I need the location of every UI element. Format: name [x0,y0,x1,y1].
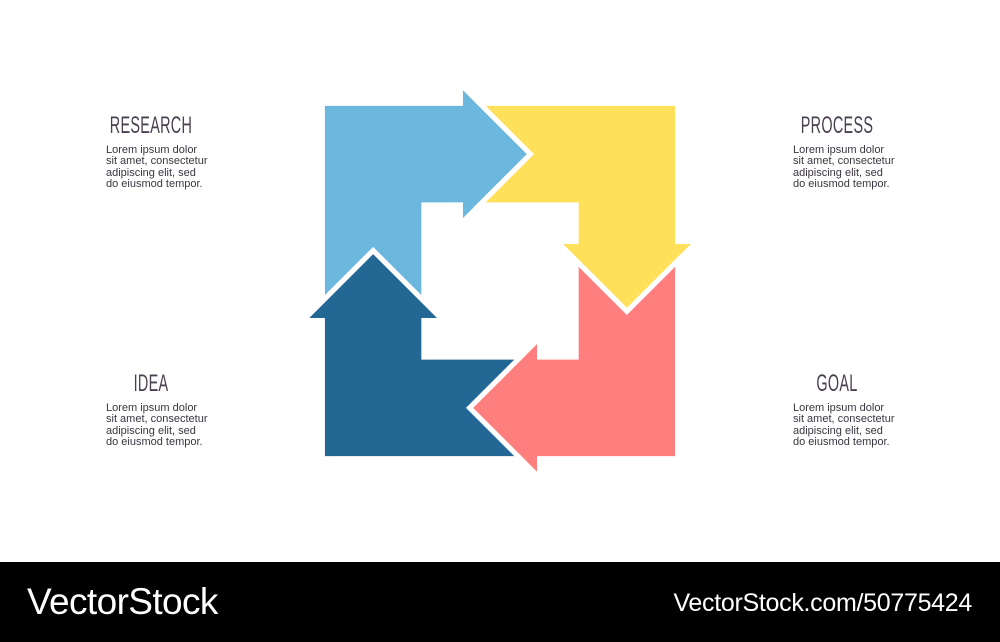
text: research: sit amet, consectetur [106,155,208,167]
text: goal: adipiscing elit, sed [793,425,883,437]
text: process [793,144,894,190]
text: idea: Lorem ipsum dolor [106,402,197,414]
text: process: do eiusmod tempor. [793,178,890,190]
arrow: idea (dark blue) [303,251,520,459]
text: goal [793,402,894,448]
text: goal: do eiusmod tempor. [793,436,890,448]
arrow: research (blue) [322,84,530,301]
text: idea: adipiscing elit, sed [106,425,196,437]
footer logo: VectorStock [27,581,218,622]
text: process: sit amet, consectetur [793,155,894,167]
footer url: VectorStock.com/50775424 [673,589,972,617]
text: process: Lorem ipsum dolor [793,144,884,156]
text: process: adipiscing elit, sed [793,167,883,179]
footer bar [0,562,1000,642]
title: goal: GOAL [816,370,858,397]
text: goal: sit amet, consectetur [793,413,894,425]
text: idea: do eiusmod tempor. [106,436,203,448]
text: idea: sit amet, consectetur [106,413,208,425]
text: research [106,144,208,190]
arrow: process (yellow) [480,103,697,311]
arrow: goal (pink) [470,261,678,478]
title: idea: IDEA [134,370,168,397]
text: research: adipiscing elit, sed [106,167,196,179]
text: goal: Lorem ipsum dolor [793,402,884,414]
text: idea [106,402,208,448]
title: research: RESEARCH [110,112,192,139]
text: research: Lorem ipsum dolor [106,144,197,156]
title: process: PROCESS [801,112,873,139]
text: research: do eiusmod tempor. [106,178,203,190]
